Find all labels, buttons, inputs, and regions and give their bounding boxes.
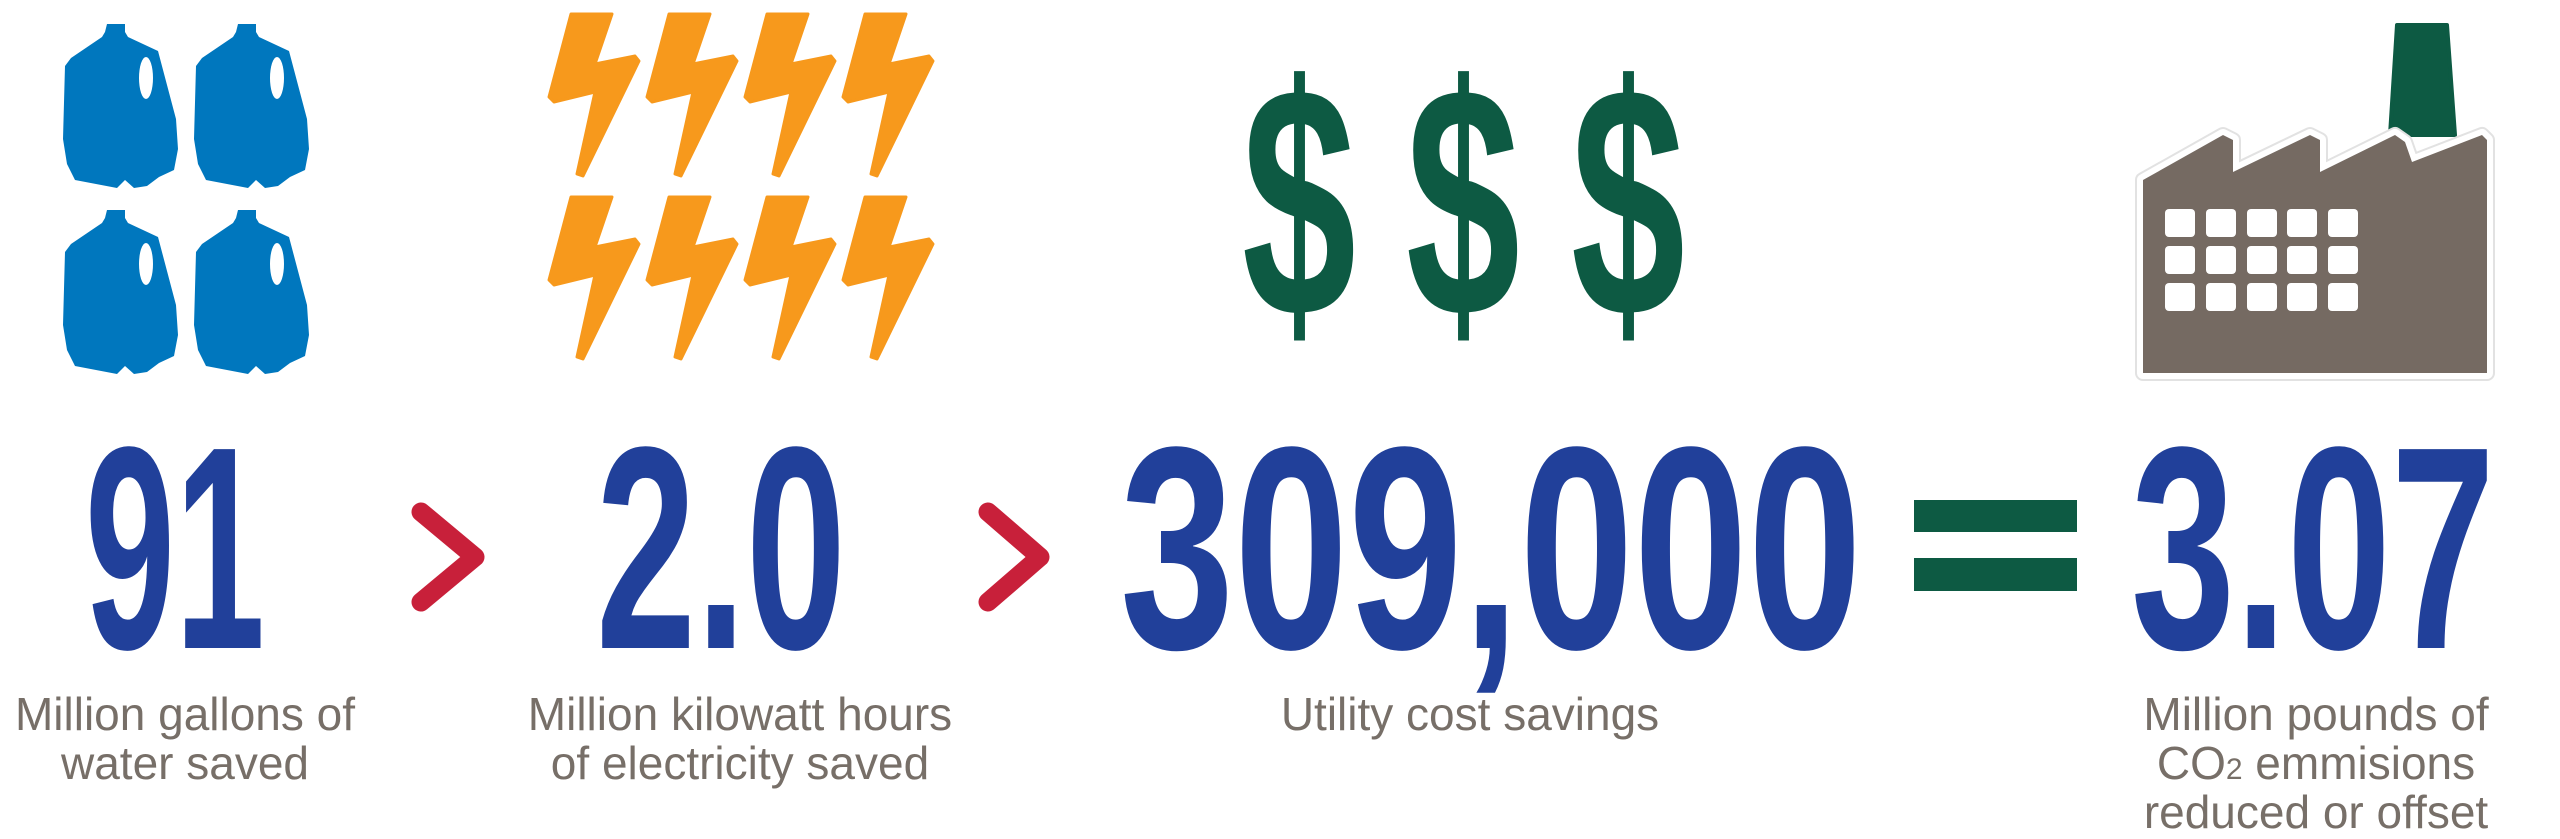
number: 309,000: 309,000: [1120, 387, 1862, 710]
label: electricity: of electricity saved: [551, 737, 929, 789]
equals sign: [1914, 500, 2077, 591]
label: electricity: Million kilowatt hours: [528, 688, 952, 740]
label: CO2: CO2 emmisions: [2157, 737, 2475, 789]
arrow: chevron 1: [421, 512, 475, 602]
label: water: Million gallons of: [15, 688, 355, 740]
label: water: water saved: [60, 737, 309, 789]
arrow: chevron 2: [988, 512, 1040, 602]
label: CO2: reduced or offset: [2144, 786, 2488, 838]
icon group: water jugs: [63, 24, 309, 374]
number: 2.0: 2.0: [596, 387, 846, 710]
icon: factory: [2143, 25, 2487, 373]
number: 91: 91: [85, 387, 265, 710]
icon group: dollar signs: $: [1242, 17, 1356, 386]
numbers: [85, 387, 2495, 710]
icon group: lightning bolts: [549, 14, 933, 359]
icon group: dollar signs: $: [1571, 17, 1685, 386]
label: CO2: Million pounds of: [2143, 688, 2489, 740]
label: cost: Utility cost savings: [1281, 688, 1659, 740]
icon group: dollar signs: $: [1406, 17, 1520, 386]
icon group: dollar signs: [1242, 17, 1685, 386]
labels: [15, 688, 2489, 838]
